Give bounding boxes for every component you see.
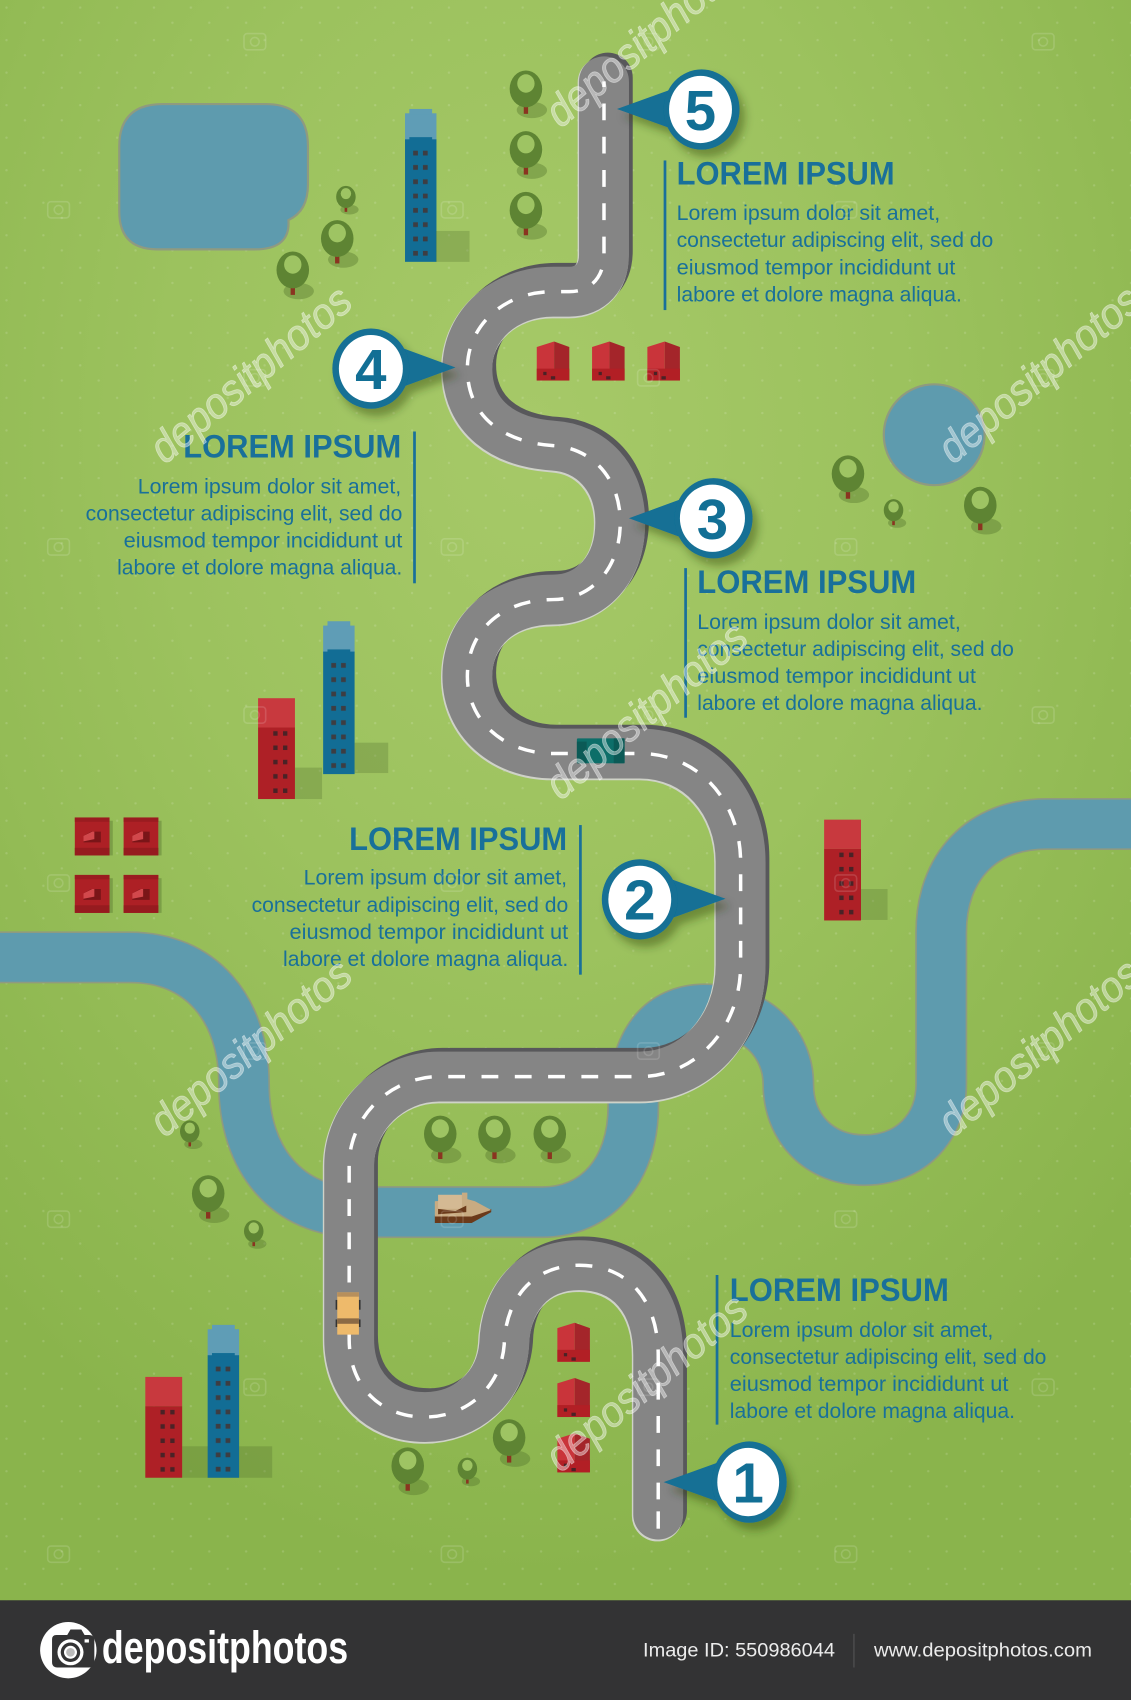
text block 5 (664, 155, 993, 310)
building: red tower centre (258, 698, 295, 799)
text block 4: Lorem ipsum dolor sit amet, (138, 475, 401, 498)
text block 5: LOREM IPSUM (677, 155, 895, 191)
watermarks: depositphotos (140, 950, 361, 1146)
text block 1: Lorem ipsum dolor sit amet, (730, 1319, 993, 1342)
text block 4: labore et dolore magna aliqua. (117, 557, 402, 580)
text block 2: eiusmod tempor incididunt ut (290, 921, 568, 944)
text block 2 (252, 821, 582, 975)
watermarks: depositphotos (536, 1285, 757, 1481)
lake: rounded (119, 104, 308, 249)
text block 5: Lorem ipsum dolor sit amet, (677, 202, 940, 225)
text block 3: labore et dolore magna aliqua. (697, 692, 982, 715)
text block 1: LOREM IPSUM (730, 1272, 949, 1308)
text block 4: consectetur adipiscing elit, sed do (86, 502, 402, 525)
watermarks (140, 0, 1131, 1481)
footer url: www.depositphotos.com (873, 1640, 1092, 1662)
car: yellow taxi (336, 1292, 361, 1335)
watermarks: depositphotos (536, 613, 757, 809)
houses: bottom column (557, 1323, 590, 1472)
marker 3: 3 (697, 488, 728, 551)
text block 1: consectetur adipiscing elit, sed do (730, 1346, 1046, 1369)
text block 3: consectetur adipiscing elit, sed do (697, 638, 1014, 661)
text block 2: consectetur adipiscing elit, sed do (252, 894, 568, 917)
building: red tower right (824, 820, 861, 920)
car: teal (577, 738, 625, 763)
building shadow: blue tower top (436, 231, 470, 262)
houses: top row (537, 342, 680, 381)
text block 3: eiusmod tempor incididunt ut (697, 665, 976, 688)
footer bar (0, 1600, 1131, 1700)
text block 4: eiusmod tempor incididunt ut (124, 530, 402, 553)
marker 5 (617, 69, 740, 150)
footer image id: Image ID: 550986044 (643, 1640, 835, 1662)
building: red tower bottom (145, 1377, 182, 1478)
text block 1: labore et dolore magna aliqua. (730, 1400, 1015, 1423)
text block 2: labore et dolore magna aliqua. (283, 948, 568, 971)
building shadow: red tower centre (295, 768, 322, 799)
text block 5: eiusmod tempor incididunt ut (677, 256, 955, 279)
footer logo icon (40, 1622, 97, 1678)
marker 1 (664, 1441, 787, 1523)
building shadow: bottom group (182, 1446, 272, 1478)
marker 2 (602, 859, 725, 939)
watermarks: depositphotos (140, 276, 361, 473)
boat (435, 1193, 491, 1223)
river (0, 824, 1131, 1212)
text block 3 (684, 564, 1014, 718)
road (348, 78, 744, 1529)
building: blue tower bottom (208, 1325, 239, 1478)
marker 4 (332, 329, 455, 409)
text block 5: consectetur adipiscing elit, sed do (677, 229, 993, 252)
building shadow: blue tower centre (355, 743, 388, 773)
text block 4: LOREM IPSUM (183, 429, 401, 465)
footer logo wordmark: depositphotos (102, 1622, 348, 1673)
text block 1: eiusmod tempor incididunt ut (730, 1373, 1009, 1396)
text block 4 (86, 429, 416, 583)
text block 3: LOREM IPSUM (697, 564, 916, 600)
trees (180, 70, 1001, 1495)
text block 1 (716, 1272, 1046, 1425)
building: blue tower centre (323, 621, 355, 774)
text block 5: labore et dolore magna aliqua. (677, 283, 962, 306)
marker 2: 2 (624, 868, 655, 931)
text block 2: LOREM IPSUM (349, 821, 567, 857)
marker 1: 1 (733, 1452, 764, 1515)
lake: round (884, 384, 985, 485)
building shadow: red tower right (861, 889, 888, 920)
marker 4: 4 (355, 338, 387, 401)
building: blue tower top (405, 109, 436, 262)
marker 3 (629, 478, 753, 558)
text block 2: Lorem ipsum dolor sit amet, (304, 867, 567, 890)
marker 5: 5 (685, 79, 716, 142)
text block 3: Lorem ipsum dolor sit amet, (697, 611, 961, 634)
houses: top-view block (75, 817, 162, 913)
